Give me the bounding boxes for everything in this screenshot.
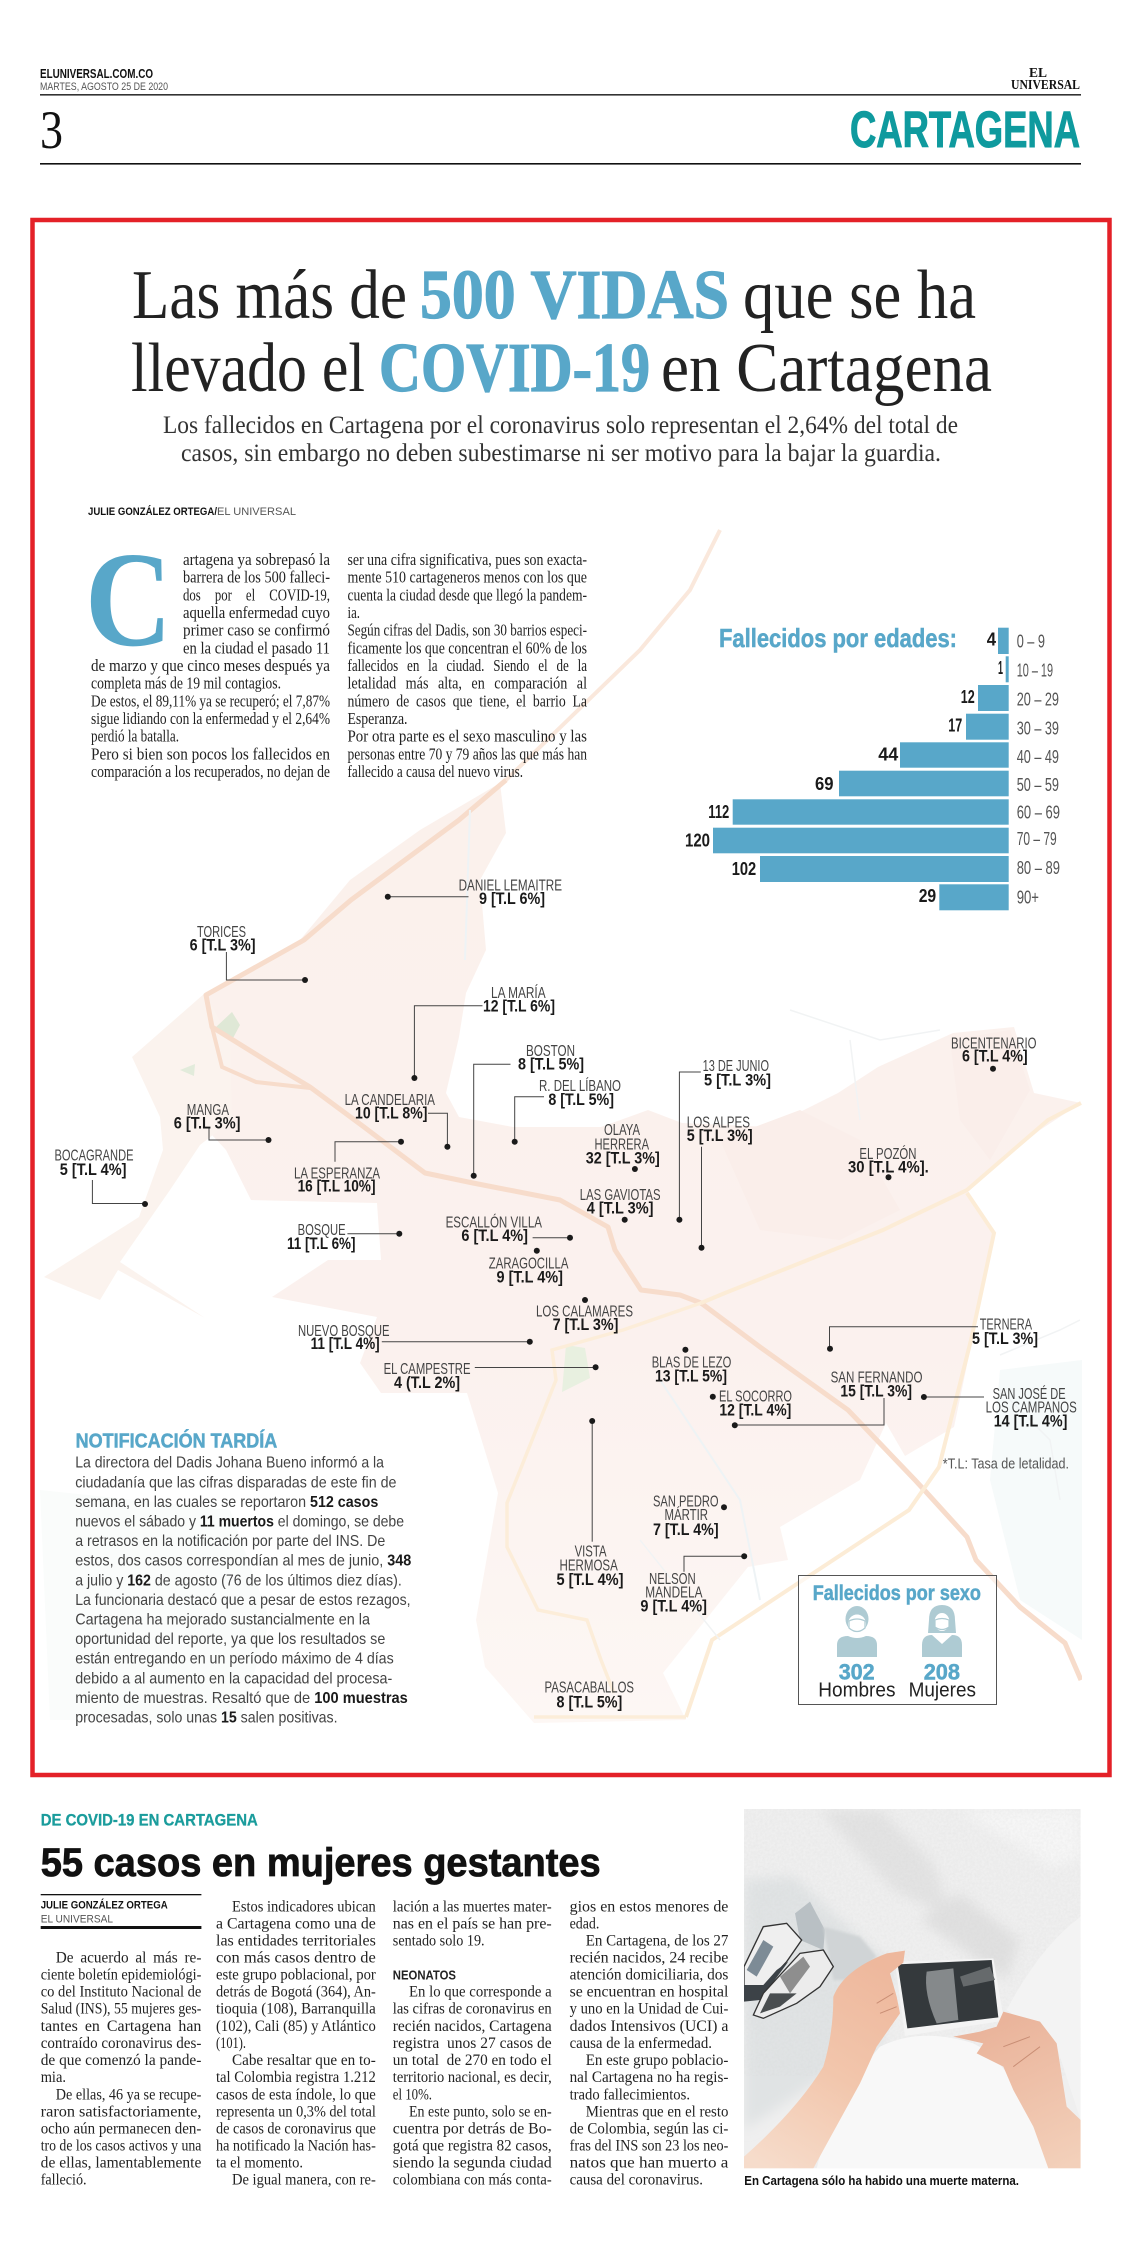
map label: Blas de Lezo: BLAS DE LEZO [652,1355,731,1372]
story column 4 [570,1899,729,2189]
story column 2: de casos de coronavirus que [216,2120,376,2137]
story column 3: lación a las muertes mater- [393,1899,552,1916]
map label: La María: LA MARÍA [491,983,546,1002]
title: Las más de [132,257,407,334]
story column 3: territorio nacional, es decir, [393,2069,552,2086]
map label: Bocagrande [54,1148,148,1207]
story column 3: sentado solo 19. [393,1933,485,1950]
bar values: 4 [987,630,996,650]
drop cap: C [85,525,172,675]
map label: Bicentenario [951,1035,1036,1072]
map label: Bocagrande: 5 [T.L 4%] [60,1160,126,1179]
story column 4: recién nacidos, 24 recibe [570,1950,729,1967]
map label: Pasacaballos [544,1680,634,1711]
map label: El Campestre: 4 (T.L 2%] [394,1373,460,1392]
byline: JULIE GONZÁLEZ ORTEGA/ [88,505,217,518]
story column 3: las cifras de coronavirus en [393,2001,552,2018]
map label: Olaya Herrera: OLAYA [604,1122,640,1139]
map label: La Candelaria [345,1092,450,1150]
story column 1: tro de los casos activos y una [41,2137,202,2154]
newspaper logo: EL [1029,65,1047,80]
story column 2 [216,1899,377,2189]
date: MARTES, AGOSTO 25 DE 2020 [40,81,168,93]
title: COVID-19 [379,330,650,407]
map label: Bosque [287,1222,402,1253]
story column 3: cuentra por detrás de Bo- [393,2120,552,2137]
pillow [1016,1918,1080,2073]
article column 1 [91,550,331,781]
story column 2: este grupo poblacional, por [216,1967,377,1984]
panel heading: NOTIFICACIÓN TARDÍA [76,1428,277,1452]
article column 1: perdió la batalla. [91,727,179,746]
highlight frame [32,220,1110,1775]
age labels: 10 – 19 [1017,661,1053,681]
bar values: 17 [948,716,962,736]
map label: San Fernando: SAN FERNANDO [831,1370,922,1387]
story column 2: (101). [216,2035,246,2052]
story column 1: De ellas, 46 ya se recupe- [56,2086,201,2103]
map label: Zaragocilla [489,1248,569,1286]
article column 1: barrera de los 500 falleci- [183,568,330,587]
map label: Bosque: 11 [T.L 6%] [287,1234,356,1253]
map label: Los Calamares: LOS CALAMARES [536,1304,633,1321]
story column 2: ha notificado la Nación has- [216,2137,376,2154]
bar values: 29 [919,886,936,906]
baby shoes [744,1923,833,2018]
story column 2: tal Colombia registra 1.212 [216,2069,376,2086]
article column 1: De estos, el 89,11% ya se recuperó; el 7,87% [91,691,330,710]
title: llevado el [131,330,365,407]
gray sock area [795,1902,825,1950]
title: que se ha [743,257,976,334]
map label: Nuevo Bosque [298,1323,533,1353]
map label: Zaragocilla: ZARAGOCILLA [489,1255,569,1272]
map label: Olaya Herrera: HERRERA [594,1136,649,1153]
story column 2: a Cartagena como una de [216,1916,376,1933]
story column 3: NEONATOS [393,1968,456,1983]
map label: Pasacaballos: PASACABALLOS [544,1680,634,1697]
map label: La María [411,983,555,1081]
map label: Los Alpes: LOS ALPES [687,1114,750,1131]
byline [88,505,296,518]
map label: Los Alpes [687,1114,753,1251]
story column 3 [393,1899,552,2189]
story column 2: tioquia (108), Barranquilla [216,2001,376,2018]
map label: Manga [174,1102,272,1143]
map label: Manga: MANGA [187,1102,229,1119]
map label: San Pedro Mártir: 7 [T.L 4%] [653,1520,719,1539]
map label: Boston: 8 [T.L 5%] [518,1054,584,1073]
story column 1: mia. [41,2069,66,2086]
story column 3: recién nacidos, Cartagena [393,2018,552,2035]
age labels: 30 – 39 [1017,718,1059,738]
article column 1: Pero si bien son pocos los fallecidos en [91,744,330,763]
article column 1: primer caso se confirmó [183,621,330,640]
map label: Nelson Mandela: MANDELA [645,1584,703,1601]
map label: La Esperanza: 16 [T.L 10%] [298,1177,376,1196]
map label: San Fernando: 15 [T.L 3%] [840,1382,912,1401]
article column 2: personas entre 70 y 79 años las que más han [348,744,587,763]
story column 4: edad. [570,1916,599,1933]
story column 2: (102), Cali (85) y Atlántico [216,2018,376,2035]
site name: ELUNIVERSAL.COM.CO [40,67,153,81]
bar values: 12 [961,687,975,707]
map label: Bocagrande: BOCAGRANDE [54,1148,134,1165]
map label: Pasacaballos: 8 [T.L 5%] [556,1692,622,1711]
map background [40,530,1082,1723]
map label: Torices [190,924,308,983]
panel body text: ciudadanía que las cifras disparadas de este fin de [75,1474,397,1491]
panel body text: estos, dos casos correspondían al mes de junio, 348 [75,1553,411,1570]
story column 1: falleció. [41,2172,87,2189]
yellow roads [701,1103,1081,1303]
map label: Bicentenario: BICENTENARIO [951,1035,1036,1052]
article column 1: comparación a los recuperados, no dejan de [91,762,330,781]
story column 1: ocho aún permanecen den- [41,2120,201,2137]
icon: man with mask [837,1606,877,1657]
map label: Ternera: 5 [T.L 3%] [972,1329,1038,1348]
map label: El Socorro: 12 [T.L 4%] [719,1401,791,1420]
green patches [216,1012,240,1038]
map label: Olaya Herrera: 32 [T.L 3%] [586,1148,660,1167]
main orange road [206,780,1081,1680]
map label: Daniel Lemaitre: DANIEL LEMAITRE [459,878,562,895]
panel body text: nuevos el sábado y 11 muertos el domingo, se debe [75,1514,404,1531]
map label: Los Calamares [536,1297,633,1334]
article column 1: sigue lidiando con la enfermedad y el 2,64% [91,709,330,728]
age labels: 90+ [1017,887,1039,907]
map label: La María: 12 [T.L 6%] [483,997,555,1016]
story column 4: se encuentran en hospital [570,1984,728,2001]
map label: Los Alpes: 5 [T.L 3%] [687,1126,753,1145]
map label: La Esperanza [294,1139,404,1196]
article column 1: dos por el COVID-19, [183,585,330,604]
story column 1: raron satisfactoriamente, [41,2103,201,2120]
map label: Escallón Villa: ESCALLÓN VILLA [446,1212,542,1231]
story column 2: representa un 0,3% del total [216,2103,376,2120]
map label: 13 de Junio [676,1058,771,1223]
story column 2: ta el momento. [216,2154,303,2171]
story column 4: causa de la enfermedad. [570,2035,712,2052]
secondary story byline: JULIE GONZÁLEZ ORTEGA [41,1898,168,1911]
subtitle [163,412,958,467]
men label: Hombres [818,1680,896,1702]
map label: El Pozón: 30 [T.L 4%]. [848,1158,929,1177]
panel body text: a retrasos en la notificación por parte del INS. De [75,1533,385,1550]
story column 3: un total de 270 en todo el [393,2052,552,2069]
panel body text: La directora del Dadis Johana Bueno informó a la [75,1455,384,1472]
bar values [685,630,1003,906]
story column 4: Mientras que en el resto [586,2103,729,2120]
age labels: 80 – 89 [1017,858,1060,878]
page header [40,65,1081,165]
map label: San Pedro Mártir: MÁRTIR [664,1505,708,1524]
article column 2: Por otra parte es el sexo masculino y las [348,727,587,746]
article column 1: aquella enfermedad cuyo [183,603,330,622]
panel body text: oportunidad del reporte, ya que los resultados se [75,1631,385,1648]
page number: 3 [40,100,63,160]
chart heading: Fallecidos por edades: [719,623,957,653]
panel: fallecidos por sexo [798,1576,996,1704]
panel body text: La funcionaria destacó que a pesar de estos rezagos, [75,1592,411,1609]
story column 4: causa del coronavirus. [570,2172,703,2189]
story column 2: con más casos dentro de [216,1950,376,1967]
article column 2: letalidad más alta, en comparación al [348,674,587,693]
newspaper logo: UNIVERSAL [1011,77,1080,92]
story column 2: las entidades territoriales [216,1933,376,1950]
map label: La Esperanza: LA ESPERANZA [294,1165,380,1182]
map label: Nelson Mandela: 9 [T.L 4%] [640,1597,707,1616]
age labels: 20 – 29 [1017,690,1059,710]
map label: 13 de Junio: 5 [T.L 3%] [704,1071,771,1090]
age labels: 40 – 49 [1017,747,1059,767]
panel: notificación tardía [75,1428,411,1727]
map label: La Candelaria: 10 [T.L 8%] [355,1103,427,1122]
map label: Las Gaviotas: 4 [T.L 3%] [587,1198,654,1217]
article column 2: ser una cifra significativa, pues son exacta- [348,550,587,569]
map label: Bicentenario: 6 [T.L 4%] [962,1047,1028,1066]
story column 4: En este grupo poblacio- [586,2052,728,2069]
faint streets [640,1010,1080,1640]
map label: Los Calamares: 7 [T.L 3%] [553,1315,618,1334]
map label: San Pedro Mártir: SAN PEDRO [653,1494,719,1511]
map label: Vista Hermosa: VISTA [575,1544,607,1561]
map label: El Campestre: EL CAMPESTRE [384,1361,470,1378]
map footnote: *T.L: Tasa de letalidad. [943,1456,1069,1472]
story column 4: dados Intensivos (UCI) a [570,2018,729,2035]
map label: Olaya Herrera [586,1122,660,1172]
bars [713,628,1009,910]
panel body text: procesadas, solo unas 15 salen positivas. [75,1710,338,1727]
map label: Vista Hermosa: 5 [T.L 4%] [556,1570,624,1589]
women count: 208 [924,1659,960,1684]
north road stretch [506,530,720,780]
story column 3: siendo la segunda ciudad [393,2154,552,2171]
map label: Vista Hermosa: HERMOSA [560,1558,618,1575]
left hand [744,1951,905,2168]
story column 3: En este punto, solo se en- [409,2103,552,2120]
story column 2: casos de esta índole, lo que [216,2086,376,2103]
map label: Ternera [827,1316,1038,1352]
story column 4: trado fallecimientos. [570,2086,690,2103]
map label: R. del Líbano [512,1076,621,1145]
map label: Las Gaviotas [580,1187,660,1223]
map label: San José de los Campanos [921,1384,1077,1431]
article column 2: ia. [348,603,360,622]
article column 1: en la ciudad el pasado 11 [183,638,330,657]
article column 2: fallecido a causa del nuevo virus. [348,762,523,781]
story column 4: nal Cartagena no ha regis- [570,2069,728,2086]
icon: woman with mask [922,1605,962,1657]
article column 2: cuenta la ciudad desde que llegó la pandem- [348,585,587,604]
map label: El Pozón [848,1144,929,1180]
panel body text: semana, en las cuales se reportaron 512 casos [75,1494,378,1511]
right hand [953,2012,1081,2168]
land north [170,783,1081,1723]
women label: Mujeres [909,1680,976,1702]
belly [817,2036,1050,2168]
secondary story byline [41,1894,201,1929]
panel body text: debido a al aumento en la capacidad del procesa- [75,1670,392,1687]
secondary story headline: 55 casos en mujeres gestantes [41,1841,601,1885]
map label: Ternera: TERNERA [980,1316,1032,1333]
title: en Cartagena [661,330,992,407]
story column 3: registra unos 27 casos de [393,2035,552,2052]
article column 2: Esperanza. [348,709,408,728]
map label: Daniel Lemaitre [385,878,562,908]
map label: Boston [471,1043,584,1179]
article column 2 [348,550,588,781]
article column 1: completa más de 19 mil contagios. [91,674,281,693]
ultrasound print [895,1958,1004,2036]
map label: Bosque: BOSQUE [298,1222,346,1239]
panel body text: Cartagena ha mejorado sustancialmente en la [75,1612,370,1629]
map label: Daniel Lemaitre: 9 [T.L 6%] [479,889,545,908]
byline: EL UNIVERSAL [217,506,296,518]
story column 3: el 10%. [393,2086,432,2103]
story column 1: co del Instituto Nacional de [41,1984,202,2001]
age labels: 0 – 9 [1017,632,1045,652]
panel body text: están entregando en un período máximo de 4 días [75,1651,394,1668]
story column 3: En lo que corresponde a [409,1984,552,2001]
map label: Nuevo Bosque: NUEVO BOSQUE [298,1323,390,1340]
map label: R. del Líbano: 8 [T.L 5%] [548,1090,614,1109]
article column 2: mente 510 cartageneros menos con los que [348,568,587,587]
bar chart: fallecidos por edades: 1 [998,658,1003,678]
land west peninsula [44,994,212,1316]
bar values: 102 [732,859,756,879]
story column 4: En Cartagena, de los 27 [586,1933,729,1950]
photo caption: En Cartagena sólo ha habido una muerte materna. [744,2173,1019,2188]
map label: El Pozón: EL POZÓN [859,1144,916,1163]
story column 1: Salud (INS), 55 mujeres ges- [41,2001,201,2018]
story column 1: contraído coronavirus des- [41,2035,201,2052]
subtitle: casos, sin embargo no deben subestimarse ni ser motivo para la bajar la guardia. [181,440,941,467]
story column 4: y uno en la Unidad de Cui- [570,2001,728,2018]
map label: San Pedro Mártir [653,1494,727,1539]
article column 2: número de casos que tiene, el barrio La [348,691,588,710]
bar values: 44 [878,745,898,765]
map label: Nelson Mandela: NELSON [649,1571,696,1588]
map label: La Candelaria: LA CANDELARIA [345,1092,435,1109]
story column 4: gios en estos menores de [570,1899,729,1916]
story column 4: atención domiciliaria, dos [570,1967,728,1984]
map label: Escallón Villa: 6 [T.L 4%] [461,1226,528,1245]
article column 1: de marzo y que cinco meses después ya [91,656,331,675]
story column 3: gotá que registra 82 casos, [393,2137,552,2154]
map label: San José de los Campanos: SAN JOSÉ DE [993,1384,1066,1403]
story column 2: Estos indicadores ubican [232,1899,376,1916]
story column 4: de Colombia, según las ci- [570,2120,728,2137]
map label: 13 de Junio: 13 DE JUNIO [703,1058,769,1075]
map label: Nelson Mandela [640,1553,747,1616]
subtitle: Los fallecidos en Cartagena por el coronavirus solo representan el 2,64% del total de [163,412,958,439]
age labels [1017,632,1060,907]
men count: 302 [839,1659,875,1684]
article column 2: fallecidos en la ciudad. Siendo el de la [348,656,588,675]
map label: Escallón Villa [446,1212,573,1245]
story column 1: tantes en Cartagena han [41,2018,202,2035]
secondary story byline: EL UNIVERSAL [41,1914,113,1926]
story column 3: nas en el país se han pre- [393,1916,552,1933]
story column 2: Cabe resaltar que en to- [232,2052,376,2069]
story column 1: de ellas, lamentablemente [41,2154,202,2171]
map label: El Socorro: EL SOCORRO [719,1389,792,1406]
secondary story kicker: DE COVID-19 EN CARTAGENA [41,1811,258,1830]
map label: San José de los Campanos: LOS CAMPANOS [986,1400,1077,1417]
story column 1 [41,1950,202,2189]
map label: Boston: BOSTON [526,1043,575,1060]
map label: Las Gaviotas: LAS GAVIOTAS [580,1187,660,1204]
article column 1: artagena ya sobrepasó la [183,550,331,569]
map label: El Campestre [384,1361,599,1392]
map label: Nuevo Bosque: 11 [T.L 4%] [311,1334,380,1353]
story column 4: natos que han muerto a [570,2154,729,2171]
age labels: 50 – 59 [1017,775,1059,795]
newspaper logo [1011,65,1080,92]
panel heading: Fallecidos por sexo [813,1582,981,1605]
panel body text: a julio y 162 de agosto (76 de los últimos diez días). [75,1572,402,1589]
story column 4: fras del INS son 23 los neo- [570,2137,728,2154]
bar chart: fallecidos por edades [685,623,1060,910]
story column 3: colombiana con más conta- [393,2172,552,2189]
story column 1: De acuerdo al más re- [56,1950,201,1967]
article column 2: Según cifras del Dadis, son 30 barrios especi- [348,621,587,640]
title [131,257,992,407]
map label: San José de los Campanos: 14 [T.L 4%] [994,1412,1067,1431]
age labels: 60 – 69 [1017,802,1060,822]
map label: Torices: 6 [T.L 3%] [190,936,256,955]
article column 2: ficamente los que concentran el 60% de los [348,638,587,657]
bar values: 112 [708,802,729,822]
map label: Vista Hermosa [556,1418,624,1589]
map label: Torices: TORICES [197,924,246,941]
age labels: 70 – 79 [1017,829,1057,849]
title: 500 VIDAS [420,257,729,334]
story column 2: detrás de Bogotá (364), An- [216,1984,376,2001]
bar values: 120 [685,831,710,851]
bar values: 69 [815,774,834,794]
map label: R. del Líbano: R. DEL LÍBANO [539,1076,621,1095]
map label: Blas de Lezo: 13 [T.L 5%] [655,1367,727,1386]
story column 1: ciente boletín epidemiológi- [41,1967,201,1984]
story column 2: De igual manera, con re- [232,2172,376,2189]
map label: Zaragocilla: 9 [T.L 4%] [496,1267,563,1286]
map label: El Socorro [710,1389,792,1420]
map label: Manga: 6 [T.L 3%] [174,1113,240,1132]
map label: Blas de Lezo [652,1347,731,1386]
story column 1: de que comenzó la pande- [41,2052,201,2069]
panel body text [75,1455,411,1727]
map label: San Fernando [732,1370,922,1428]
panel body text: miento de muestras. Resaltó que de 100 muestras [75,1690,408,1707]
photo: pregnant woman holding ultrasound [744,1809,1081,2168]
